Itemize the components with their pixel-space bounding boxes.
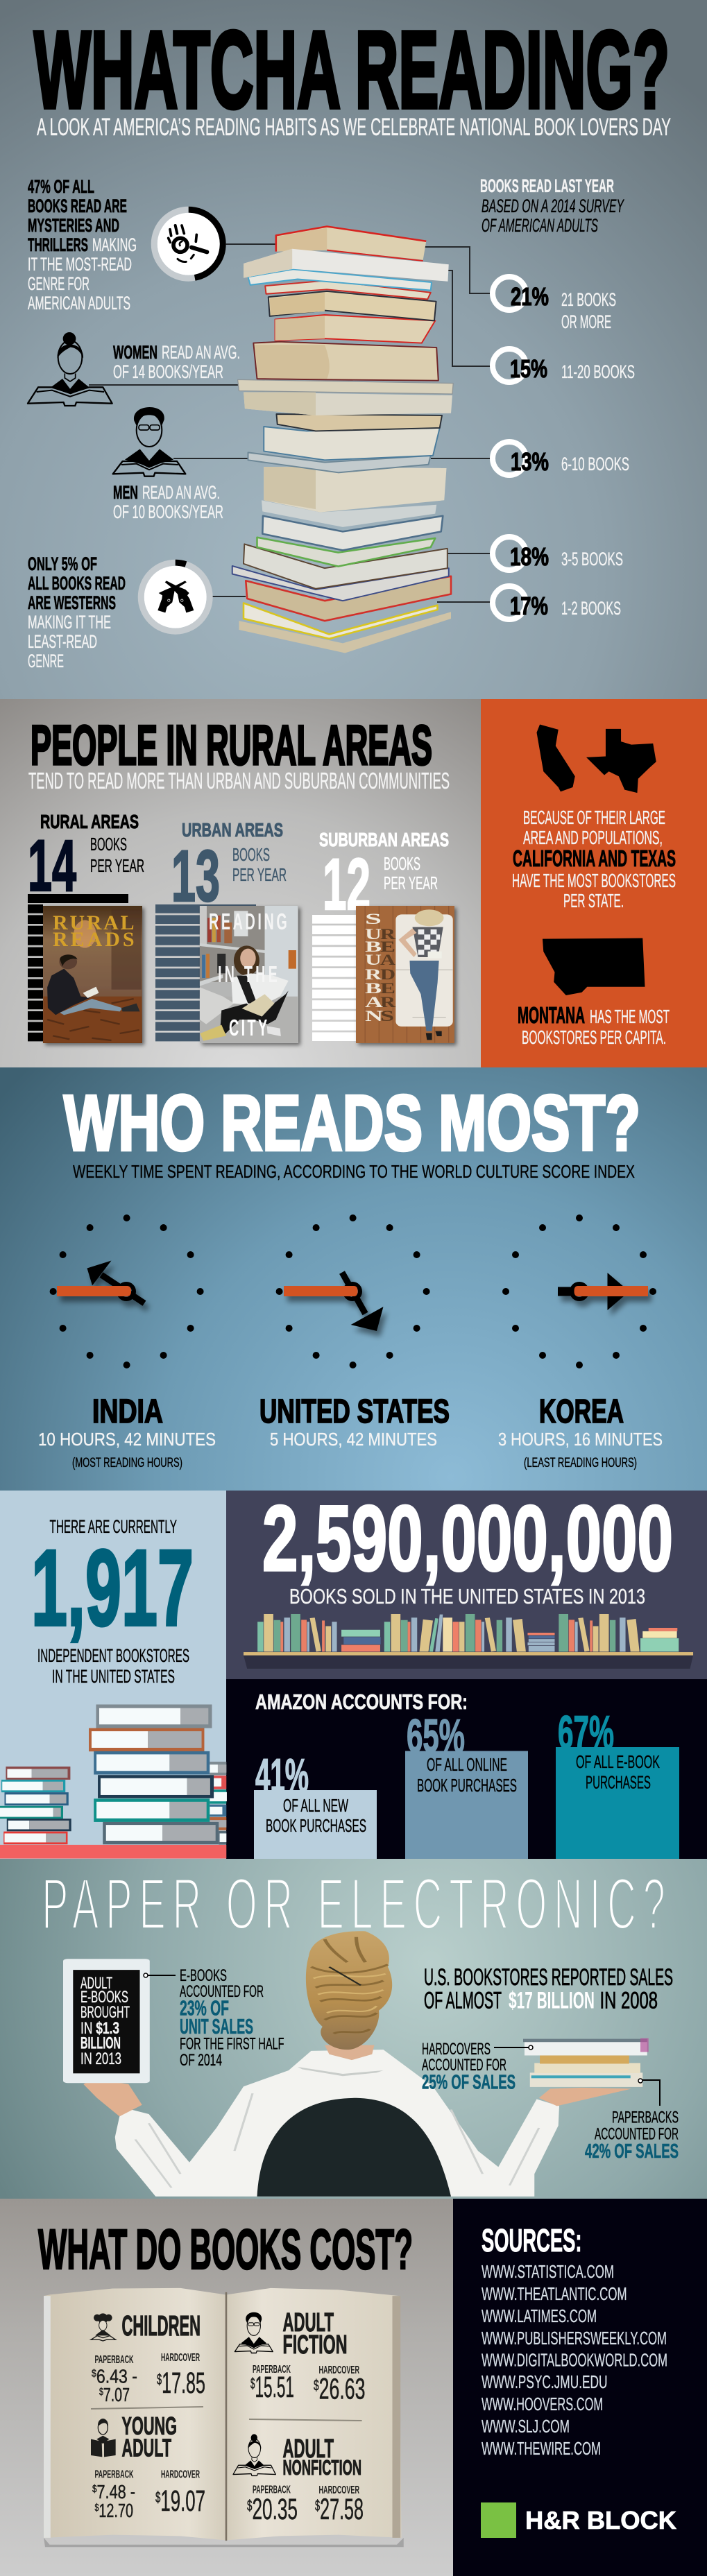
price block: young adult: PAPERBACK [94,2469,134,2481]
connector lines [89,244,491,602]
clock: india: INDIA [92,1393,163,1430]
price block: adult nonfiction [233,2434,364,2526]
price block: young adult: 19.07 [160,2484,205,2518]
price block: adult nonfiction: $ [315,2497,320,2514]
icon: tablet with text: ADULT [80,1974,112,1993]
stat: 15 percent: 11-20 BOOKS [561,361,635,382]
clock: united states [259,1214,450,1450]
price block: children [91,2310,205,2405]
text: mysteries and thrillers: MAKING [92,234,137,255]
book cover: suburban readers: S [365,910,382,927]
text: bookstore sales: OF ALMOST [424,1988,502,2014]
panel: amazon [226,1679,707,1859]
clock: korea: 3 HOURS, 16 MINUTES [498,1429,663,1450]
book cover: suburban readers: D [380,965,395,983]
text: westerns: ALL BOOKS READ [28,573,126,594]
callout: e-books: ACCOUNTED FOR [180,1982,264,2001]
stat: 13 percent [493,442,629,476]
column: suburban areas: SUBURBAN AREAS [319,829,449,850]
section background: what do books cost [0,2199,453,2576]
text: mysteries and thrillers: MYSTERIES AND [28,215,119,236]
bar: online book purchases 65 percent: 65% [407,1710,465,1762]
text: mysteries and thrillers: AMERICAN ADULTS [28,293,130,314]
clock: korea: KOREA [539,1393,624,1430]
map icon: montana [543,938,645,995]
logo: h&r block [481,2502,676,2538]
stat: 17 percent: 17% [510,592,548,620]
heading: sources: SOURCES: [482,2222,581,2258]
book cover: suburban readers: A [365,993,383,1011]
price block: children: $ [99,2386,103,2398]
book cover: suburban readers: U [365,925,382,943]
text: westerns: ONLY 5% OF [28,553,97,574]
text: women average [113,342,240,382]
book cover: reading in the city [200,906,298,1043]
panel: books sold [226,1491,707,1679]
price block: children: 17.85 [162,2367,205,2400]
text: independent bookstores: INDEPENDENT BOOKSTORES [37,1645,189,1666]
price block: young adult [91,2412,205,2521]
price block: young adult: HARDCOVER [161,2469,200,2481]
text: mysteries and thrillers: BOOKS READ ARE [28,196,127,216]
text: westerns: GENRE [28,651,64,671]
section background: who reads most [0,1067,707,1491]
column: suburban areas [319,829,454,1043]
icon: tablet with text: BILLION [80,2034,121,2053]
column: rural areas: BOOKS [90,834,127,855]
bar: new book purchases 41 percent: OF ALL NEW [283,1795,348,1816]
bar: e-book purchases 67 percent: PURCHASES [586,1771,651,1792]
clock: india: 10 HOURS, 42 MINUTES [38,1429,216,1450]
callout: e-books: E-BOOKS [180,1966,227,1985]
icon: tablet with text [63,1959,150,2083]
price block: adult nonfiction: 27.58 [320,2493,364,2526]
text: books read last year heading: OF AMERICAN ADULTS [482,215,598,236]
book cover: rural reads: RURAL [53,911,135,934]
panel: orange state facts [481,699,707,1067]
price block: adult nonfiction: $ [247,2497,252,2514]
column: suburban areas: BOOKS [384,853,420,874]
column: rural areas: PER YEAR [90,855,144,876]
callout: e-books [144,1966,284,2070]
bar: e-book purchases 67 percent: 67% [558,1706,614,1759]
illustration: flat book stacks [0,1704,227,1859]
text: mysteries and thrillers [28,176,137,314]
stat: 17 percent [493,586,621,620]
icon: tablet with text: IN $1.3 [80,2019,119,2038]
price block: children: $ [92,2368,96,2379]
list: source urls: WWW.STATISTICA.COM [482,2261,614,2282]
list: source urls: WWW.LATIMES.COM [482,2305,597,2326]
list: source urls: WWW.THEWIRE.COM [482,2438,601,2459]
bar: new book purchases 41 percent: 41% [255,1749,309,1802]
bar: online book purchases 65 percent [405,1710,528,1859]
bar: e-book purchases 67 percent [556,1706,679,1859]
price block: adult fiction: ADULT [283,2308,334,2337]
stat: 17 percent: 1-2 BOOKS [561,598,621,619]
list: source urls: WWW.PSYC.JMU.EDU [482,2371,608,2392]
callout: hardcovers: HARDCOVERS [422,2040,491,2059]
heading: amazon accounts for: AMAZON ACCOUNTS FOR: [255,1690,468,1714]
price block: young adult: ADULT [122,2434,171,2462]
text: westerns: ARE WESTERNS [28,592,116,613]
stat: 18 percent: 18% [510,542,549,571]
book cover: suburban readers: B [365,938,382,955]
book cover: suburban readers [356,906,454,1043]
stat: 21 percent: 21 BOOKS [561,289,616,310]
text: independent bookstores: THERE ARE CURRENTLY [50,1516,177,1537]
column: rural areas: RURAL AREAS [40,811,139,832]
clock: united states: 5 HOURS, 42 MINUTES [270,1429,437,1450]
donut icon: westerns 5% [141,563,210,631]
text: bookstore sales [424,1964,673,2014]
stat: 21 percent: OR MORE [561,311,611,332]
column: rural areas [28,811,144,1043]
icon: man reading [113,407,185,476]
illustration: books in hand [523,2038,649,2087]
price block: children: PAPERBACK [94,2354,134,2366]
clock: korea: (LEAST READING HOURS) [524,1456,637,1470]
price block: adult fiction: 15.51 [255,2371,294,2404]
clock: india [38,1214,216,1470]
book cover: suburban readers: R [380,993,397,1011]
column: rural areas: 14 [28,825,76,907]
icon: tablet with text: IN 2013 [80,2050,121,2068]
callout: e-books: OF 2014 [180,2051,222,2070]
text: independent bookstores: 1,917 [31,1528,194,1649]
text: mysteries and thrillers: THRILLERS [28,234,88,255]
bar: new book purchases 41 percent [254,1749,377,1859]
text: california and texas: PER STATE. [563,890,624,911]
section background: reading habits [0,0,707,699]
book cover: reading in the city: READING [209,909,287,934]
book cover: suburban readers: A [380,951,395,968]
text: westerns [28,553,126,671]
list: source urls: WWW.HOOVERS.COM [482,2394,603,2414]
icon: tablet with text: E-BOOKS [80,1988,128,2007]
price block: children: $ [157,2371,162,2388]
text: montana: MONTANA [518,1002,585,1028]
text: montana [518,1002,670,1048]
book cover: suburban readers: E [380,979,395,997]
price block: adult fiction: $ [250,2375,255,2392]
text: men average: MEN [113,482,138,503]
text: independent bookstores: IN THE UNITED STATES [52,1666,175,1687]
icon: tablet with text: BROUGHT [80,2003,130,2022]
book cover: suburban readers: U [365,951,382,968]
text: bookstore sales: $17 BILLION [509,1988,595,2014]
book cover: reading in the city: IN THE [218,961,278,987]
text: mysteries and thrillers: 47% OF ALL [28,176,94,197]
callout: hardcovers: 25% OF SALES [422,2071,516,2093]
icon: woman reading [28,332,112,406]
text: women average: OF 14 BOOKS/YEAR [113,361,223,382]
price block: adult nonfiction: ADULT [283,2435,334,2464]
column: urban areas: BOOKS [232,844,270,865]
text: mysteries and thrillers: IT THE MOST-READ [28,254,132,275]
list: source urls: WWW.SLJ.COM [482,2416,570,2437]
callout: paperbacks [585,2079,679,2163]
price block: young adult: YOUNG [122,2412,177,2440]
photo illustration: woman holding tablet and books [83,1931,631,2197]
text: westerns: MAKING IT THE [28,612,111,633]
price block: adult nonfiction: PAPERBACK [253,2484,291,2496]
column: suburban areas: PER YEAR [384,873,438,893]
price block: adult fiction: HARDCOVER [319,2364,359,2376]
text: men average [113,482,223,522]
bar: online book purchases 65 percent: BOOK PURCHASES [417,1775,517,1796]
bar: online book purchases 65 percent: OF ALL ONLINE [427,1754,507,1775]
price block: young adult: $ [155,2489,160,2506]
clock: united states: UNITED STATES [259,1393,450,1430]
book cover: suburban readers: B [365,979,382,997]
price block: children: 7.07 [103,2384,130,2405]
text: women average: READ AN AVG. [162,342,240,363]
book cover: suburban readers: R [380,925,397,943]
stat: 18 percent: 3-5 BOOKS [561,549,623,569]
price block: adult fiction [235,2308,365,2405]
text: men average: OF 10 BOOKS/YEAR [113,501,223,522]
section background: rural areas [0,699,481,1067]
panel: sources [453,2199,707,2576]
stat: 15 percent: 15% [510,354,547,383]
price block: adult fiction: 26.63 [319,2372,365,2405]
column: urban areas [171,819,298,1043]
price block: children: CHILDREN [122,2310,201,2342]
section background: paper or electronic [0,1859,707,2199]
book cover: suburban readers: R [365,965,383,983]
bar: new book purchases 41 percent: BOOK PURCHASES [266,1815,366,1836]
panel: independent bookstores [0,1491,226,1859]
book cover: suburban readers: N [365,1007,383,1024]
stat: 18 percent [493,537,623,571]
list: source urls [482,2261,667,2459]
text: women average: WOMEN [113,342,157,363]
text: bookstore sales: IN 2008 [599,1988,658,2014]
price block: adult fiction: $ [314,2376,319,2394]
clock: india: (MOST READING HOURS) [72,1456,182,1470]
price block: adult fiction: PAPERBACK [253,2364,291,2376]
column: suburban areas: 12 [323,844,370,925]
price block: young adult: $ [94,2502,99,2514]
price block: children: HARDCOVER [161,2352,200,2364]
callout: e-books: 23% OF [180,1996,229,2020]
text: westerns: LEAST-READ [28,631,97,652]
logo: h&r block: H&R BLOCK [525,2506,676,2534]
stat: 13 percent: 6-10 BOOKS [561,454,629,474]
stat: 15 percent [493,349,635,383]
heading: paper or electronic: PAPER OR ELECTRONIC? [42,1863,665,1944]
callout: hardcovers [422,2040,533,2093]
callout: e-books: FOR THE FIRST HALF [180,2035,284,2053]
price block: young adult: 12.70 [99,2500,133,2521]
price block: adult nonfiction: HARDCOVER [319,2484,359,2496]
column: urban areas: URBAN AREAS [182,819,283,841]
book cover: reading in the city: CITY [229,1015,267,1040]
text: independent bookstores [31,1516,194,1687]
price block: adult nonfiction: NONFICTION [283,2455,361,2480]
text: california and texas [512,807,676,911]
clock: korea [498,1214,663,1470]
book cover: rural reads: READS [53,928,135,951]
price block: children: 6.43 - [96,2365,137,2387]
donut icon: mysteries and thrillers 47% [154,209,223,278]
list: source urls: WWW.THEATLANTIC.COM [482,2283,627,2304]
callout: e-books: UNIT SALES [180,2014,253,2038]
book cover: rural reads [43,906,142,1043]
column: urban areas: 13 [171,836,220,917]
callout: hardcovers: ACCOUNTED FOR [422,2056,506,2075]
price block: young adult: $ [92,2483,97,2495]
price block: young adult: 7.48 - [96,2481,135,2502]
text: men average: READ AN AVG. [142,482,220,503]
illustration: stack of books [232,227,453,653]
price block: adult fiction: FICTION [283,2330,347,2360]
book cover: suburban readers: E [380,938,395,955]
column: urban areas: PER YEAR [232,864,287,885]
stat: 13 percent: 13% [511,447,549,476]
stat: 21 percent: 21% [511,282,549,311]
stat: 21 percent [493,277,616,332]
book cover: suburban readers: S [380,1007,394,1024]
price block: adult nonfiction: 20.35 [252,2493,298,2526]
map icons: california and texas [537,725,656,793]
illustration: bookshelf [244,1614,693,1669]
text: books read last year heading [480,175,624,236]
illustration: open book [44,2288,404,2547]
text: mysteries and thrillers: GENRE FOR [28,273,90,294]
